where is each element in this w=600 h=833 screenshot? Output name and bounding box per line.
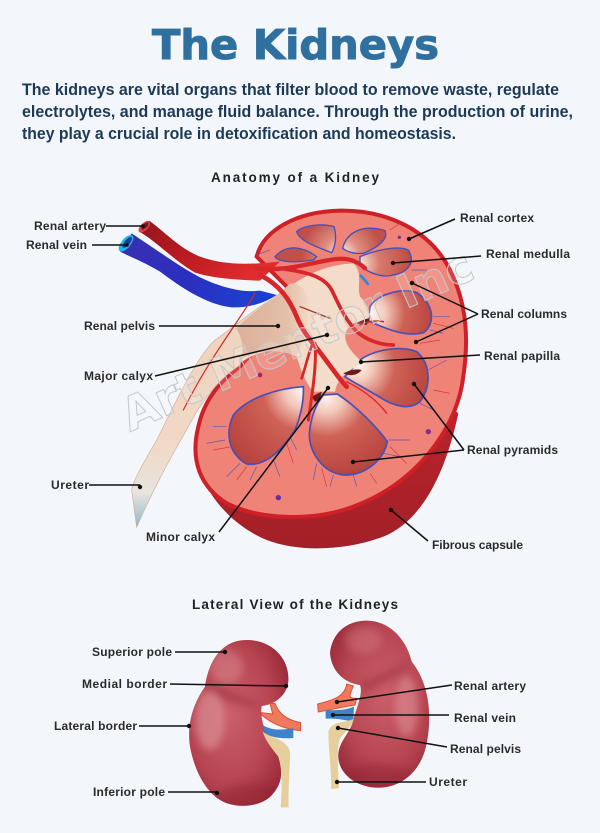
labels: lateral left [54,645,288,799]
label: inferior pole: Inferior pole [93,785,165,799]
label: renal medulla: Renal medulla [486,247,570,261]
label: ureter right: Ureter [429,775,467,789]
right kidney hilum [318,684,357,789]
renal vein [116,233,277,307]
label: ureter right [335,775,467,789]
kidney cut face [195,211,466,517]
pyramid: bottom left [229,387,303,464]
label: renal vein [26,238,129,252]
label: lateral border [54,719,191,733]
label: superior pole: Superior pole [92,645,172,659]
label: ureter: Ureter [51,478,89,492]
label: lateral border: Lateral border [54,719,137,733]
small vessels [258,236,431,500]
label: renal artery [34,219,145,233]
right kidney [330,621,429,788]
label: renal cortex: Renal cortex [460,211,534,225]
label: renal columns: Renal columns [481,307,567,321]
label: medial border: Medial border [82,677,167,691]
left kidney [189,640,288,806]
pyramid: right upper [368,291,431,334]
dark openings [312,318,370,402]
label: renal vein right [331,711,516,725]
label: renal columns [410,281,567,344]
artery branches [183,259,393,420]
left kidney shading [192,648,278,806]
label: renal medulla [391,247,570,265]
blood twigs [207,250,450,487]
label: renal pyramids [351,382,558,464]
label: superior pole [92,645,227,659]
label: renal pelvis [84,319,280,333]
label: renal pelvis right [336,726,521,756]
intro text: electrolytes, and manage fluid balance. Through the production of urine, [22,103,573,121]
label: renal papilla [359,349,560,364]
watermark: Art Mentor Inc [113,238,482,442]
labels: lateral right [331,679,526,789]
diagram: lateral kidneys [189,621,429,823]
intro text [22,81,573,143]
kidney outer capsule depth [195,367,458,548]
ureter [132,297,277,527]
renal sinus [227,263,369,392]
intro text: they play a crucial role in detoxification and homeostasis. [22,125,456,143]
label: renal papilla: Renal papilla [484,349,560,363]
pyramid: right lower [345,349,428,407]
label: major calyx [84,333,329,383]
renal artery [137,219,280,281]
blue vein stub [360,275,368,285]
label: renal artery right: Renal artery [454,679,526,693]
label: inferior pole [93,785,219,799]
pyramid: far top left [275,248,317,262]
labels: anatomy left [26,219,330,544]
label: minor calyx [146,386,330,544]
label: renal pelvis: Renal pelvis [84,319,155,333]
renal pelvis [237,283,309,358]
label: renal pyramids: Renal pyramids [467,443,558,457]
pyramid: top middle [343,228,386,253]
label: medial border [82,677,288,691]
label: renal cortex [407,211,534,241]
label: fibrous capsule: Fibrous capsule [432,538,523,552]
intro text: The kidneys are vital organs that filter blood to remove waste, regulate [22,81,559,99]
heading: anatomy: Anatomy of a Kidney [211,170,379,185]
diagram: kidney cross-section [116,211,466,548]
right kidney shading [340,627,418,797]
label: renal pelvis right: Renal pelvis [450,742,521,756]
pyramid: bottom centre [309,394,387,475]
label: renal artery: Renal artery [34,219,106,233]
label: ureter [51,478,142,492]
heading: lateral view: Lateral View of the Kidneys [192,597,398,612]
labels: anatomy right [351,211,570,552]
pyramid: top left [297,225,336,253]
label: minor calyx: Minor calyx [146,530,215,544]
title: The Kidneys [152,21,439,69]
left kidney hilum [262,703,301,807]
label: renal vein right: Renal vein [454,711,516,725]
label: renal vein: Renal vein [26,238,87,252]
label: fibrous capsule [389,508,523,552]
label: major calyx: Major calyx [84,369,153,383]
label: renal artery right [335,679,526,704]
pyramid: upper right [360,248,411,276]
